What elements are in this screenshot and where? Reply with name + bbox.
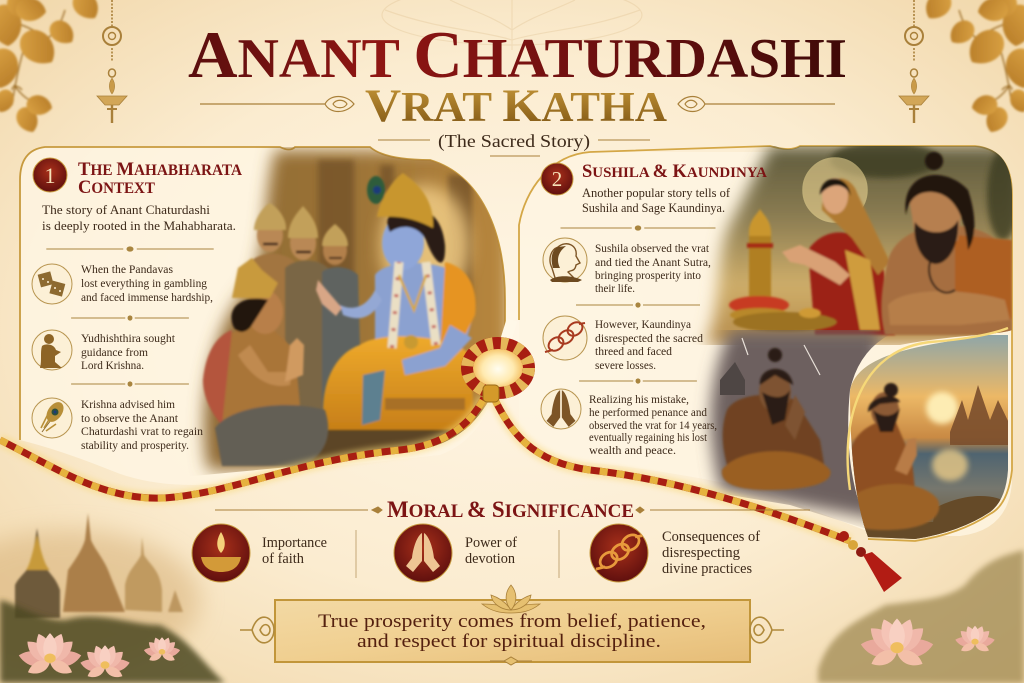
left strand bbox=[0, 398, 484, 498]
lightning bbox=[742, 338, 820, 375]
lotus ornament bbox=[482, 585, 540, 613]
Yudhishthira bbox=[203, 258, 328, 466]
small temple bbox=[168, 590, 183, 612]
panel 2 point: penance: he performed penance and bbox=[589, 407, 707, 419]
Kaundinya arms crossed bbox=[881, 152, 1012, 335]
far temple silhouette bbox=[720, 362, 745, 395]
moral: faith: Importance bbox=[262, 535, 327, 551]
panel 2 point: disrespect: severe losses. bbox=[595, 360, 656, 372]
panel 2 point: vrat: their life. bbox=[595, 283, 635, 295]
panel 1 heading: THE MAHABHARATA bbox=[78, 159, 243, 180]
Sushila bbox=[782, 178, 895, 335]
scene divider glow bbox=[848, 328, 1008, 490]
right strand bbox=[494, 398, 850, 541]
sacred thread with knot bbox=[0, 320, 850, 541]
panel 2 point: disrespect: disrespected the sacred bbox=[595, 333, 703, 345]
panel 1 intro bbox=[42, 202, 236, 233]
panel 2 intro: Sushila and Sage Kaundinya. bbox=[582, 200, 725, 215]
panel 2 cream card bbox=[519, 146, 1012, 541]
icon: praying figure bbox=[32, 330, 72, 370]
moral: consequences: Consequences of bbox=[662, 529, 760, 545]
panel 1 point: advice bbox=[81, 399, 203, 452]
far temple bbox=[125, 537, 162, 612]
sun glow bbox=[926, 392, 958, 424]
moral: faith bbox=[192, 524, 327, 582]
icon: peacock feather bbox=[32, 398, 72, 438]
top-left leaves bbox=[0, 0, 103, 136]
panel 2 intro bbox=[582, 185, 731, 215]
moral: consequences: disrespecting bbox=[662, 545, 740, 561]
tagline: (The Sacred Story) bbox=[438, 131, 590, 152]
subtitle flourishes bbox=[200, 96, 835, 112]
sunset river backdrop bbox=[845, 335, 1015, 540]
moral: faith: of faith bbox=[262, 551, 305, 567]
bottom-left haze bbox=[0, 530, 200, 670]
left flourish bbox=[240, 617, 274, 643]
river shine bbox=[932, 449, 968, 481]
quote banner: and respect for spiritual discipline. bbox=[357, 631, 661, 652]
trees bbox=[830, 142, 1019, 240]
scene backdrop bbox=[204, 150, 510, 470]
right flourish bbox=[750, 617, 784, 643]
river bank bbox=[863, 496, 1000, 539]
ring centre bbox=[472, 347, 524, 391]
moral heading rules bbox=[215, 507, 810, 513]
scene floor shadow bbox=[306, 407, 484, 462]
tassel bbox=[839, 531, 902, 592]
icon: knotted thread bbox=[543, 316, 587, 360]
panel 2 heading badge bbox=[541, 163, 573, 195]
panel 1 dividers bbox=[46, 246, 214, 387]
halo bbox=[803, 158, 867, 222]
panel 1 point: guidance: guidance from bbox=[81, 347, 148, 359]
bottom-left foliage bbox=[0, 600, 225, 683]
panel 1 point: advice: to observe the Anant bbox=[81, 413, 179, 425]
panel 2 point: disrespect bbox=[595, 319, 703, 372]
panel 1 cream card bbox=[20, 147, 505, 485]
moral: consequences: divine practices bbox=[662, 561, 752, 577]
panel 1 heading badge bbox=[33, 158, 67, 192]
storm sky bbox=[711, 330, 880, 520]
scene: Krishna and Pandavas bbox=[203, 150, 510, 470]
kalash pillar and plate bbox=[729, 209, 837, 332]
icon: folded hands bbox=[541, 389, 581, 429]
panel 2 point: penance: Realizing his mistake, bbox=[589, 394, 689, 406]
temple pillars bbox=[318, 160, 472, 305]
panel 2 point: penance: wealth and peace. bbox=[589, 445, 676, 457]
panel 1 point: guidance bbox=[81, 333, 176, 372]
panel 2 heading badge: 2 bbox=[552, 167, 562, 191]
panel 2 point: vrat: bringing prosperity into bbox=[595, 270, 701, 282]
moral heading: MORAL & SIGNIFICANCE bbox=[387, 497, 634, 522]
top-right leaves bbox=[921, 0, 1024, 136]
panel 1 point: guidance: Lord Krishna. bbox=[81, 360, 144, 372]
far temples bbox=[950, 385, 1010, 445]
knot ring bbox=[467, 343, 529, 393]
Krishna halo bbox=[380, 185, 470, 305]
faint tree watermark bbox=[382, 0, 642, 50]
thread glow bbox=[0, 398, 850, 541]
panel 1 intro: The story of Anant Chaturdashi bbox=[42, 202, 210, 217]
scene: sunset penance bbox=[850, 335, 1008, 539]
sky backdrop bbox=[705, 146, 1020, 345]
seated figure bbox=[722, 348, 830, 490]
tagline rules bbox=[378, 140, 650, 156]
right hanging lamp bbox=[899, 0, 929, 123]
moral: devotion bbox=[394, 524, 517, 582]
panel 2 point: vrat: Sushila observed the vrat bbox=[595, 243, 710, 255]
panel 1 point: advice: Chaturdashi vrat to regain bbox=[81, 426, 203, 438]
panel 2 point: disrespect: However, Kaundinya bbox=[595, 319, 691, 331]
Pandava brothers bbox=[252, 203, 361, 410]
bottom ornament bbox=[490, 657, 532, 665]
cream ribbon behind ring bbox=[502, 320, 512, 352]
lotus flowers bbox=[17, 616, 996, 680]
middle temple bbox=[63, 513, 125, 612]
icon: dice bbox=[32, 264, 72, 304]
left hanging lamp bbox=[97, 0, 127, 123]
panel 1 point: gambling: lost everything in gambling bbox=[81, 278, 207, 290]
panel 1 point: guidance: Yudhishthira sought bbox=[81, 333, 176, 345]
panel 1 heading bbox=[78, 159, 243, 198]
panel 2 dividers bbox=[560, 225, 716, 384]
panel 1 point: gambling: When the Pandavas bbox=[81, 264, 174, 276]
moral dividers bbox=[356, 530, 559, 578]
Krishna bbox=[316, 173, 476, 430]
scene: Sushila and Kaundinya bbox=[705, 142, 1020, 345]
panel 1 intro: is deeply rooted in the Mahabharata. bbox=[42, 218, 236, 233]
panel 2 intro: Another popular story tells of bbox=[582, 185, 731, 200]
panel 1 heading: CONTEXT bbox=[78, 177, 156, 198]
panel 2 point: vrat: and tied the Anant Sutra, bbox=[595, 257, 711, 269]
panel 2 point: penance bbox=[589, 394, 717, 457]
panel 1 point: advice: Krishna advised him bbox=[81, 399, 175, 411]
panel 1 point: advice: stability and prosperity. bbox=[81, 440, 189, 452]
subtitle: VRAT KATHA bbox=[365, 80, 668, 132]
quote text: True prosperity comes from belief, patience, bbox=[318, 611, 706, 632]
icon: Sushila profile bbox=[543, 238, 587, 282]
panel 2 point: penance: eventually regaining his lost bbox=[589, 432, 708, 444]
scene: Kaundinya in distress bbox=[711, 330, 880, 520]
quote banner bbox=[240, 585, 784, 665]
panel 1 heading badge: 1 bbox=[44, 163, 56, 188]
moral: devotion: Power of bbox=[465, 535, 517, 551]
panel 1 point: gambling bbox=[81, 264, 213, 304]
title: ANANT CHATURDASHI bbox=[188, 18, 847, 92]
panel 2 heading: SUSHILA & KAUNDINYA bbox=[582, 162, 767, 182]
bottom-right foliage bbox=[818, 550, 1024, 683]
panel 2 point: vrat bbox=[595, 243, 711, 295]
panel 1 point: gambling: and faced immense hardship, bbox=[81, 292, 213, 304]
near temple bbox=[15, 528, 60, 618]
panel 2 point: disrespect: threed and faced bbox=[595, 346, 672, 358]
panel 2 point: penance: observed the vrat for 14 years, bbox=[589, 420, 717, 432]
praying figure bbox=[840, 383, 939, 530]
gold knot bbox=[483, 385, 499, 402]
moral: devotion: devotion bbox=[465, 551, 516, 567]
bottom-left temples bbox=[15, 513, 183, 618]
moral: consequences bbox=[590, 524, 760, 582]
